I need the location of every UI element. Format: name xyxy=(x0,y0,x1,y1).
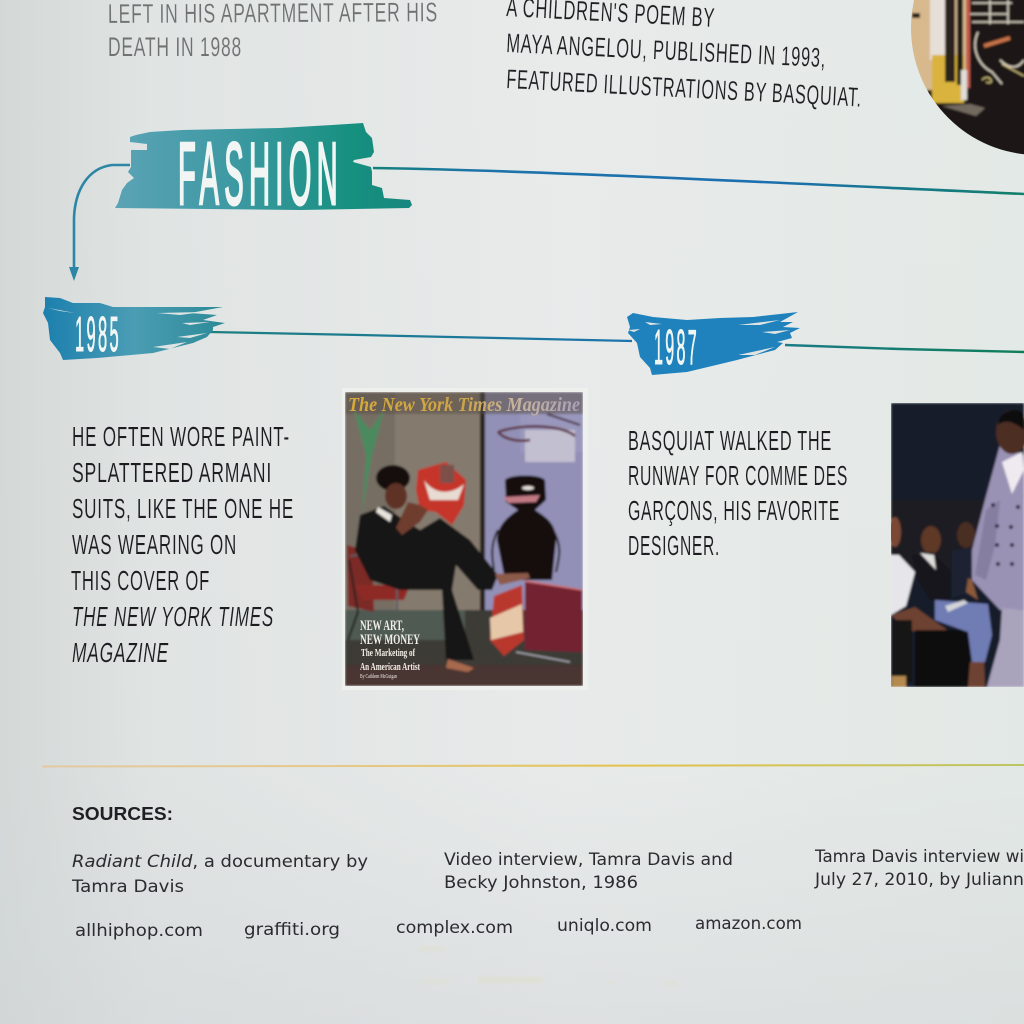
text block: children's poem xyxy=(506,0,863,113)
timeline line from 1987 xyxy=(785,345,1024,352)
text block: website sources: uniqlo.com xyxy=(557,916,652,936)
text block: Tamra Davis interview source xyxy=(814,847,1024,890)
cover: headline: NEW ART, xyxy=(360,618,404,634)
cover: red painting xyxy=(416,462,466,525)
text block: apartment note: DEATH IN 1988 xyxy=(108,32,242,62)
cover: headline: NEW MONEY xyxy=(360,632,420,648)
text: FASHION xyxy=(178,124,343,223)
image: Basquiat painting in circle xyxy=(911,0,1024,154)
text block: video interview source xyxy=(444,850,733,893)
year badge: 1985 xyxy=(43,297,225,362)
year badge: 1985: 1985 xyxy=(75,308,121,362)
text block: website sources xyxy=(75,914,802,941)
text block: Comme des Garçons: GARÇONS, HIS FAVORITE xyxy=(628,495,840,526)
text block: Tamra Davis interview source: July 27, 2010, by Juliann xyxy=(814,870,1024,890)
cover: orange and white cushion xyxy=(490,585,524,656)
text block: Armani suits: THE NEW YORK TIMES xyxy=(72,601,274,632)
year badge: 1987 xyxy=(627,312,800,375)
year badge: 1987: 1987 xyxy=(654,321,699,375)
cover: headline xyxy=(360,618,420,680)
text block: Comme des Garçons: DESIGNER. xyxy=(628,530,720,561)
cover: black figure xyxy=(497,476,556,580)
text block: apartment note xyxy=(108,0,438,62)
cover: headline: By Cathleen McGuigan xyxy=(360,673,397,680)
text block: Armani suits: WAS WEARING ON xyxy=(72,529,237,560)
text block: website sources: complex.com xyxy=(396,918,513,938)
text block: Armani suits xyxy=(71,421,294,668)
text block: website sources: allhiphop.com xyxy=(75,921,203,941)
photo: model in lavender suit xyxy=(972,445,1024,610)
text block: Armani suits: HE OFTEN WORE PAINT- xyxy=(72,421,290,452)
text block: Radiant Child source xyxy=(71,852,368,897)
text block: video interview source: Becky Johnston, 1986 xyxy=(444,873,638,893)
text block: Armani suits: SPLATTERED ARMANI xyxy=(72,457,272,488)
photo: seated woman in black with jeans xyxy=(921,526,941,554)
text block: Radiant Child source: Tamra Davis xyxy=(71,877,184,897)
cover: dark red cushion xyxy=(525,582,582,652)
text block: Armani suits: THIS COVER OF xyxy=(71,565,210,596)
cover: headline: The Marketing of xyxy=(361,647,415,659)
timeline line from FASHION xyxy=(373,168,1024,194)
text block: website sources: graffiti.org xyxy=(244,920,340,940)
cover: red chair xyxy=(347,545,374,612)
photo: third seated person xyxy=(957,522,975,548)
cover: masthead: The New York Times Magazine xyxy=(348,394,580,416)
arrow: FASHION to 1985 xyxy=(69,165,130,281)
text block: Radiant Child source: Radiant Child , a documentary by xyxy=(72,852,368,872)
text block: video interview source: Video interview, Tamra Davis and xyxy=(444,850,733,870)
text block: Comme des Garçons: RUNWAY FOR COMME DES xyxy=(628,460,848,491)
text block: Comme des Garçons xyxy=(628,425,848,561)
cover: man in suit xyxy=(376,465,410,491)
cover: floor xyxy=(345,608,583,667)
cover: headline: An American Artist xyxy=(360,661,420,673)
divider xyxy=(42,765,1024,766)
photo: seated woman in white xyxy=(891,555,915,615)
heading: sources: SOURCES: xyxy=(72,804,173,824)
text block: Armani suits: MAGAZINE xyxy=(72,637,169,668)
text block: children's poem: MAYA ANGELOU, PUBLISHED IN 1993, xyxy=(506,28,827,73)
image: New York Times Magazine cover xyxy=(342,388,588,690)
timeline line 1985 to 1987 xyxy=(210,332,632,341)
text block: website sources: amazon.com xyxy=(695,914,802,934)
text block: Tamra Davis interview source: Tamra Davis interview wi xyxy=(814,847,1024,867)
cover: green plant xyxy=(354,410,384,515)
text block: Comme des Garçons: BASQUIAT WALKED THE xyxy=(628,425,832,456)
image: runway photograph xyxy=(889,403,1024,687)
text block: Armani suits: SUITS, LIKE THE ONE HE xyxy=(72,493,294,524)
heading: FASHION brush banner xyxy=(115,123,412,223)
